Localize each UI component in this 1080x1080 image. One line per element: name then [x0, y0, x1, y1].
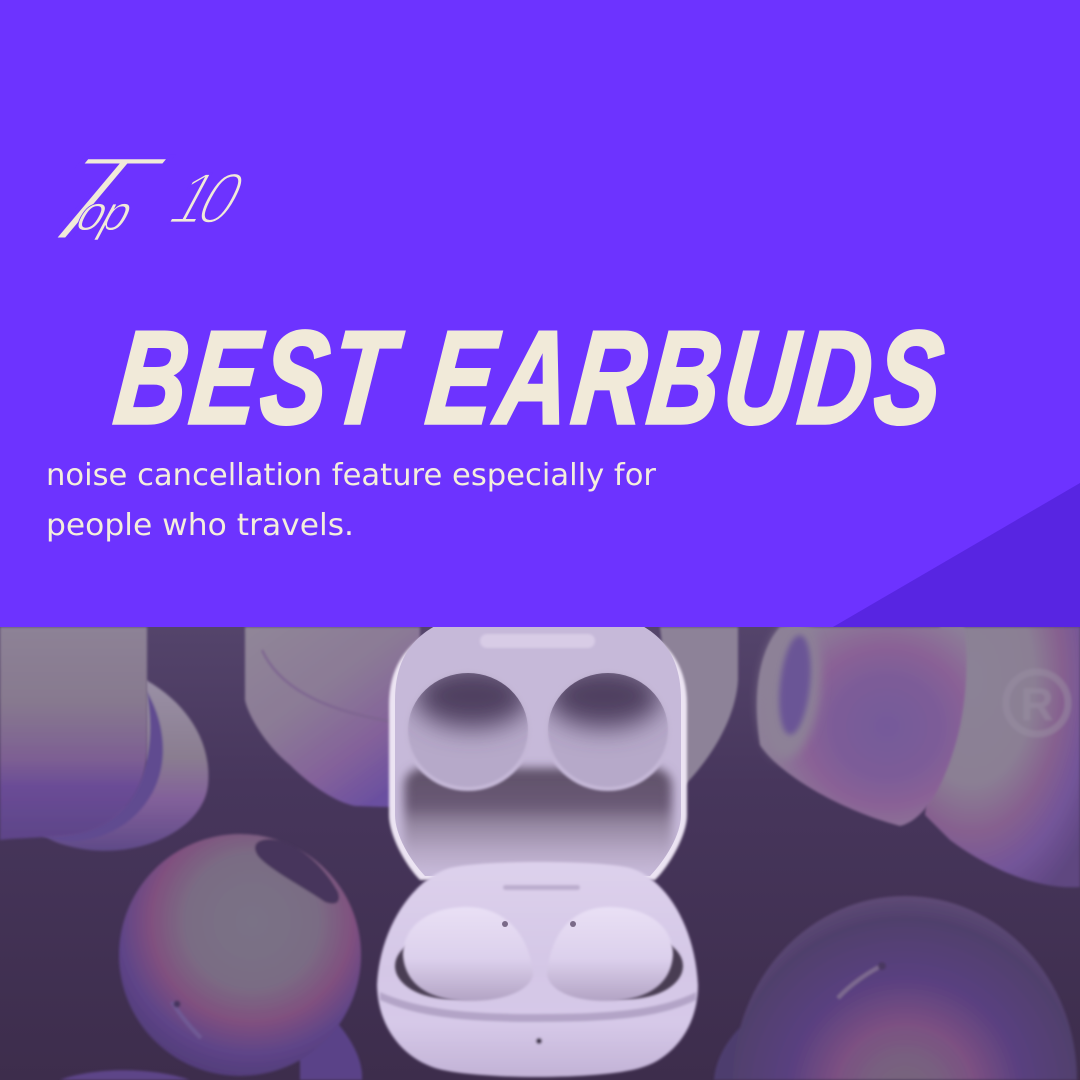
- earbud: right eartip: [753, 617, 966, 826]
- case: left earbud: [403, 907, 533, 1001]
- case: dark tray recesses: [393, 944, 685, 1001]
- case: earbud sensors: [502, 921, 576, 927]
- accent triangle: [833, 483, 1080, 627]
- title: BEST EARBUDS: BEST EARBUDS: [109, 303, 954, 451]
- subtitle: noise cancellation feature especially for: [46, 458, 657, 493]
- script heading: Top 10: 10: [156, 159, 257, 239]
- subtitle: people who travels.: [46, 508, 354, 543]
- case: base: [377, 862, 698, 1077]
- earbud: right far body with R mark: R: [1020, 678, 1054, 730]
- earbud: top-left crescent: [38, 680, 208, 851]
- photo: earbuds and charging case: [0, 617, 1080, 1080]
- earbud: right far body with R mark: [925, 627, 1080, 887]
- case: left cup: [408, 673, 528, 792]
- earbud: top-left body: [0, 627, 147, 840]
- earbud: top-middle: [245, 627, 420, 808]
- earbud: bottom-right ball: [714, 896, 1077, 1080]
- case: right cup: [548, 673, 668, 792]
- script heading: Top 10: op: [66, 185, 144, 241]
- earbud: top-middle right part: [660, 627, 738, 790]
- subtitle: [46, 458, 657, 543]
- case: lid: [389, 620, 690, 880]
- case: right earbud: [547, 907, 673, 1001]
- charging case: [377, 620, 698, 1077]
- earbud: bottom-left ball: [60, 834, 362, 1080]
- purple background: [0, 0, 1080, 627]
